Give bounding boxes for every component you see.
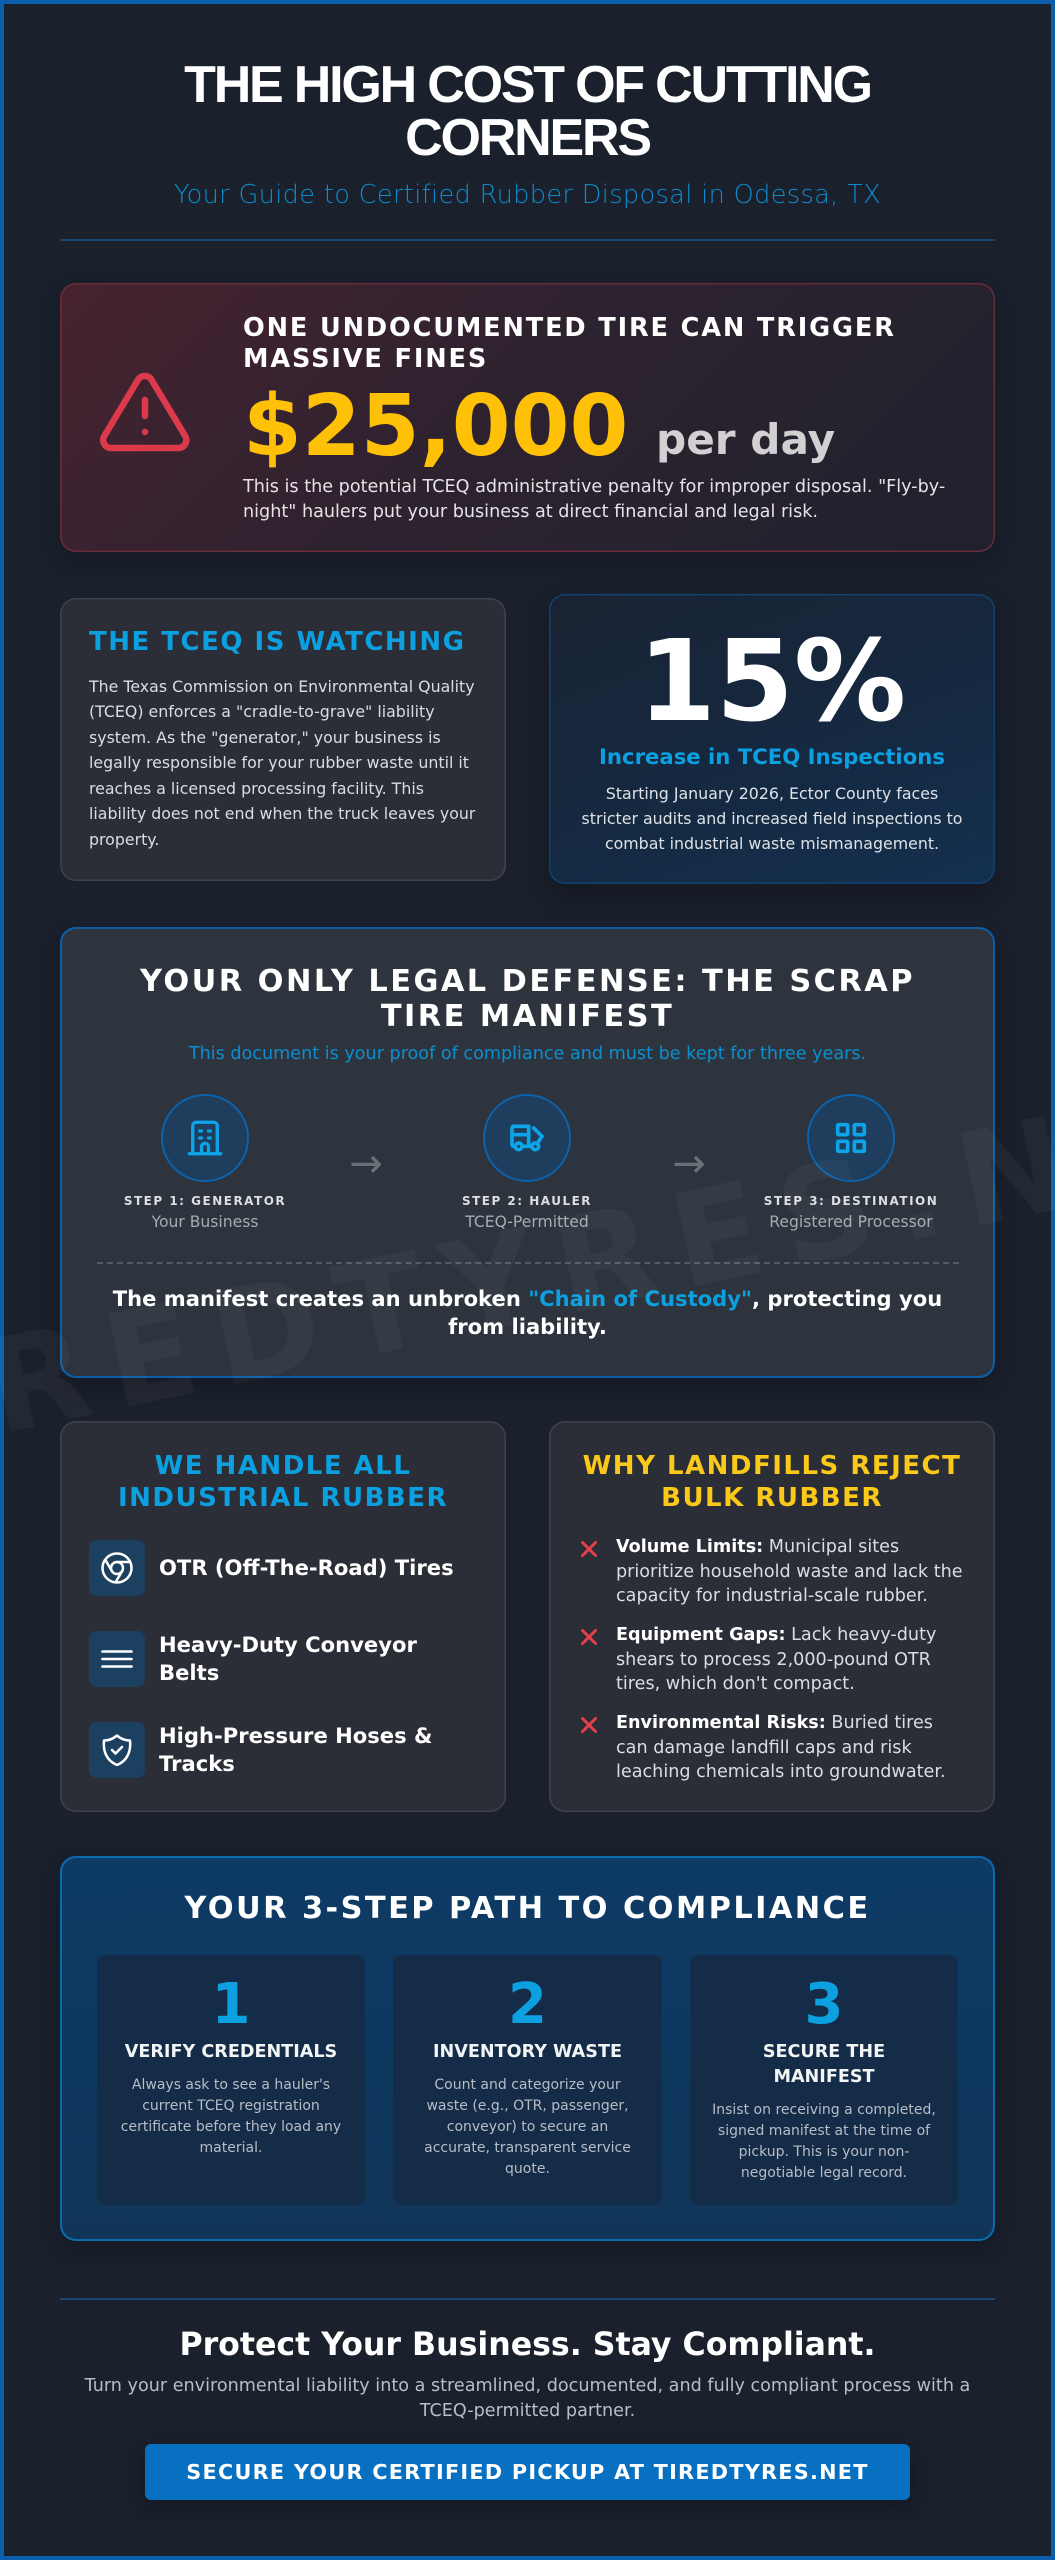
body text: The Texas Commission on Environmental Quality xyxy=(89,676,475,696)
step sublabel: Your Business xyxy=(151,1213,258,1231)
step sublabel: TCEQ-Permitted xyxy=(465,1213,589,1231)
icon: x xyxy=(580,1628,598,1646)
step title xyxy=(763,2042,885,2087)
heading: YOUR 3-STEP PATH TO COMPLIANCE xyxy=(184,1891,871,1926)
step text: signed manifest at the time of xyxy=(718,2123,930,2139)
step text: Count and categorize your xyxy=(434,2077,621,2093)
step title: VERIFY CREDENTIALS xyxy=(125,2042,337,2062)
alert heading: MASSIVE FINES xyxy=(243,344,488,374)
fine amount: $25,000 xyxy=(243,376,628,475)
reason: equipment gaps xyxy=(580,1625,936,1694)
heading: INDUSTRIAL RUBBER xyxy=(118,1483,448,1513)
big number: 15% xyxy=(638,617,906,747)
heading: YOUR ONLY LEGAL DEFENSE: THE SCRAP xyxy=(140,964,915,999)
step card 3 xyxy=(690,1955,958,2205)
icon: belts xyxy=(89,1631,145,1687)
step text: Insist on receiving a completed, xyxy=(712,2102,936,2118)
step label: STEP 1: GENERATOR xyxy=(124,1194,286,1208)
title: THE HIGH COST OF CUTTING xyxy=(184,56,871,114)
panel: TCEQ is watching xyxy=(60,598,506,881)
reason text xyxy=(616,1625,936,1694)
body text: legally responsible for your rubber waste until it xyxy=(89,753,469,772)
body text: (TCEQ) enforces a "cradle-to-grave" liability xyxy=(89,702,435,721)
call to action button xyxy=(145,2444,910,2500)
step text: Always ask to see a hauler's xyxy=(132,2077,330,2093)
item label xyxy=(159,1632,417,1685)
reason text: Volume Limits: Municipal sites xyxy=(616,1537,899,1557)
panel: 15% statistic xyxy=(549,594,995,884)
footer text: TCEQ-permitted partner. xyxy=(420,2401,635,2421)
step number: 3 xyxy=(805,1972,843,2037)
panel: why landfills reject xyxy=(549,1421,995,1812)
step title: SECURE THE xyxy=(763,2042,885,2062)
alert heading: ONE UNDOCUMENTED TIRE CAN TRIGGER xyxy=(243,313,896,343)
heading xyxy=(140,964,915,1034)
footer text: Turn your environmental liability into a streamlined, documented, and fully compliant process with a xyxy=(85,2376,970,2396)
title: CORNERS xyxy=(405,109,650,167)
heading: BULK RUBBER xyxy=(661,1483,883,1513)
item label: Heavy-Duty Conveyor xyxy=(159,1632,417,1657)
step text: accurate, transparent service xyxy=(424,2140,631,2156)
footer text xyxy=(84,2376,970,2421)
step title: MANIFEST xyxy=(773,2067,875,2087)
title xyxy=(184,56,871,167)
footer heading: Protect Your Business. Stay Compliant. xyxy=(179,2327,876,2363)
heading: TIRE MANIFEST xyxy=(381,999,674,1034)
reason text: tires, which don't compact. xyxy=(616,1674,855,1694)
item: conveyor belts xyxy=(89,1631,417,1687)
alert heading xyxy=(243,313,896,374)
icon: warning triangle xyxy=(100,372,190,452)
call to action button: SECURE YOUR CERTIFIED PICKUP AT TIREDTYRES.NET xyxy=(186,2460,869,2484)
heading: WE HANDLE ALL xyxy=(155,1451,411,1481)
icon: building xyxy=(161,1094,248,1182)
stat label: Increase in TCEQ Inspections xyxy=(599,744,945,769)
body text: liability does not end when the truck leaves your xyxy=(89,804,475,823)
heading: WHY LANDFILLS REJECT xyxy=(583,1451,961,1481)
panel: fines alert xyxy=(60,283,995,552)
step text xyxy=(121,2077,341,2156)
panel: industrial rubber xyxy=(60,1421,506,1812)
panel: 3-step path xyxy=(60,1856,995,2241)
arrow: → xyxy=(672,1141,706,1187)
reason text: prioritize household waste and lack the xyxy=(616,1562,963,1582)
item label: OTR (Off-The-Road) Tires xyxy=(159,1555,454,1580)
step text: current TCEQ registration xyxy=(142,2098,320,2114)
step text: negotiable legal record. xyxy=(741,2165,907,2181)
chain of custody statement: The manifest creates an unbroken "Chain of Custody", protecting you xyxy=(113,1286,942,1311)
step number: 2 xyxy=(508,1972,547,2037)
item label xyxy=(159,1723,432,1776)
reason text xyxy=(616,1713,946,1782)
stat text: combat industrial waste mismanagement. xyxy=(605,834,939,853)
body text: property. xyxy=(89,830,159,849)
icon: tire xyxy=(89,1540,145,1596)
subheading: This document is your proof of compliance and must be kept for three years. xyxy=(189,1044,866,1064)
step 1: generator xyxy=(124,1094,286,1231)
step text: conveyor) to secure an xyxy=(447,2119,608,2135)
step number: 1 xyxy=(212,1972,250,2037)
reason: environmental risks xyxy=(580,1713,946,1782)
heading xyxy=(118,1451,448,1513)
stat text: Starting January 2026, Ector County faces xyxy=(606,784,938,803)
body text: system. As the "generator," your business is xyxy=(89,728,441,747)
step text: waste (e.g., OTR, passenger, xyxy=(426,2098,629,2114)
arrow: → xyxy=(349,1141,383,1187)
reason text: shears to process 2,000-pound OTR xyxy=(616,1650,931,1670)
alert text: night" haulers put your business at direct financial and legal risk. xyxy=(243,502,818,522)
step title: INVENTORY WASTE xyxy=(433,2042,622,2062)
body text: reaches a licensed processing facility. This xyxy=(89,779,424,798)
step text xyxy=(712,2102,936,2181)
body text xyxy=(88,676,476,849)
step text: pickup. This is your non- xyxy=(739,2144,909,2160)
reason: volume limits xyxy=(580,1537,963,1606)
item label: Tracks xyxy=(159,1751,235,1776)
reason text xyxy=(616,1537,963,1606)
step 2: hauler xyxy=(462,1094,592,1231)
subtitle: Your Guide to Certified Rubber Disposal in Odessa, TX xyxy=(174,180,881,210)
reason text: Environmental Risks: Buried tires xyxy=(616,1713,933,1733)
chain of custody statement xyxy=(112,1286,942,1339)
step text: certificate before they load any xyxy=(121,2119,341,2135)
step sublabel: Registered Processor xyxy=(769,1213,933,1231)
icon: truck xyxy=(483,1094,570,1182)
item: hoses and tracks xyxy=(89,1722,432,1778)
heading xyxy=(583,1451,961,1513)
step card 2 xyxy=(393,1955,662,2205)
step text: material. xyxy=(200,2140,262,2156)
reason text: can damage landfill caps and risk xyxy=(616,1738,912,1758)
item label: High-Pressure Hoses & xyxy=(159,1723,432,1748)
step 3: destination xyxy=(764,1094,938,1231)
icon: shield xyxy=(89,1722,145,1778)
reason text: capacity for industrial-scale rubber. xyxy=(616,1586,928,1606)
panel: scrap tire manifest xyxy=(60,927,995,1378)
step label: STEP 3: DESTINATION xyxy=(764,1194,938,1208)
icon: x xyxy=(580,1716,598,1734)
stat text: stricter audits and increased field inspections to xyxy=(582,809,962,828)
item: OTR tires xyxy=(89,1540,454,1596)
step text xyxy=(424,2077,631,2177)
reason text: leaching chemicals into groundwater. xyxy=(616,1762,946,1782)
icon: grid xyxy=(807,1094,894,1182)
per day label: per day xyxy=(656,415,835,464)
stat text xyxy=(582,784,962,853)
alert text xyxy=(242,477,945,522)
icon: x xyxy=(580,1540,598,1558)
step card 1 xyxy=(97,1955,365,2205)
heading: THE TCEQ IS WATCHING xyxy=(89,627,465,657)
chain of custody statement: from liability. xyxy=(448,1314,607,1339)
step label: STEP 2: HAULER xyxy=(462,1194,592,1208)
reason text: Equipment Gaps: Lack heavy-duty xyxy=(616,1625,936,1645)
step text: quote. xyxy=(505,2161,550,2177)
alert text: This is the potential TCEQ administrative penalty for improper disposal. "Fly-by- xyxy=(243,477,945,497)
item label: Belts xyxy=(159,1660,219,1685)
